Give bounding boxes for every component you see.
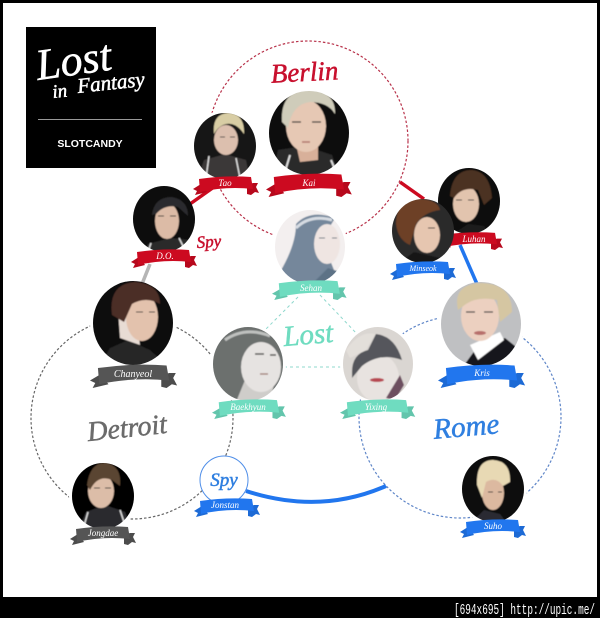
ribbon: Sehan: Sehan [300, 283, 322, 293]
ribbon: Baekhyun [212, 399, 286, 419]
ribbon: Jonstan: Jonstan [211, 500, 239, 510]
logo panel: Fantasy [75, 67, 146, 98]
portrait: Suho [462, 456, 524, 520]
portrait: Minseok [392, 199, 454, 262]
connector: Spy to Rome [246, 486, 386, 502]
portrait: Luhan [438, 168, 500, 233]
ribbon: Kai: Kai [301, 178, 316, 188]
label: red Spy: Spy [196, 231, 222, 252]
ribbon: Suho: Suho [484, 521, 502, 531]
ribbon: Jongdae [70, 526, 136, 545]
portrait: Chanyeol [93, 281, 173, 365]
portrait: Kai [269, 91, 349, 174]
ribbon: Suho [460, 519, 526, 538]
ribbon: Yixing: Yixing [365, 402, 388, 412]
portrait: Sehan [275, 210, 345, 282]
ribbon: D.O. [131, 249, 197, 268]
connector: Luhan to Kris [460, 245, 477, 284]
logo panel: Lost [32, 31, 116, 90]
circle: Detroit [31, 317, 233, 519]
ribbon: Chanyeol: Chanyeol [114, 369, 152, 380]
ribbon: Luhan [437, 232, 503, 250]
ribbon: Kai [266, 174, 352, 197]
portrait: D.O. [133, 186, 195, 250]
ribbon: Yixing [340, 399, 415, 419]
ribbon: Jongdae: Jongdae [88, 528, 118, 538]
logo panel: SLOTCANDY [57, 138, 123, 150]
ribbon: Tao [193, 176, 259, 195]
ribbon: Minseok [390, 261, 456, 280]
logo panel: in [51, 81, 68, 103]
portrait: Yixing [343, 327, 413, 400]
portrait: Kris [441, 282, 521, 366]
ribbon: Jonstan [194, 498, 260, 517]
ribbon: Baekhyun: Baekhyun [230, 402, 266, 412]
ribbon: Minseok: Minseok [408, 264, 437, 273]
node: Spy circle: Spy [210, 470, 238, 491]
logo panel [26, 27, 156, 168]
connector: D.O. to Chanyeol [142, 264, 150, 284]
label: Lost: Lost [281, 317, 335, 353]
ribbon: Sehan [272, 280, 347, 300]
ribbon: Luhan: Luhan [461, 234, 486, 244]
label: Berlin: Berlin [270, 55, 339, 89]
portrait: Jongdae [72, 463, 134, 528]
connector: Berlin to Minseok [400, 182, 424, 199]
ribbon: D.O.: D.O. [155, 251, 174, 261]
portrait: Tao [194, 113, 256, 178]
ribbon: Chanyeol [90, 365, 177, 388]
triangle: Lost links [264, 295, 358, 367]
label: Rome: Rome [431, 408, 501, 446]
ribbon: Tao: Tao [218, 178, 232, 188]
ribbon: Kris: Kris [473, 368, 490, 378]
ribbon: Kris [438, 365, 525, 388]
circle: Rome [359, 316, 561, 518]
label: Detroit: Detroit [85, 409, 170, 448]
node: Spy circle [200, 456, 248, 504]
connector: Tao to D.O. [190, 187, 214, 204]
portrait: Baekhyun [213, 327, 283, 400]
circle: Berlin [208, 41, 408, 241]
